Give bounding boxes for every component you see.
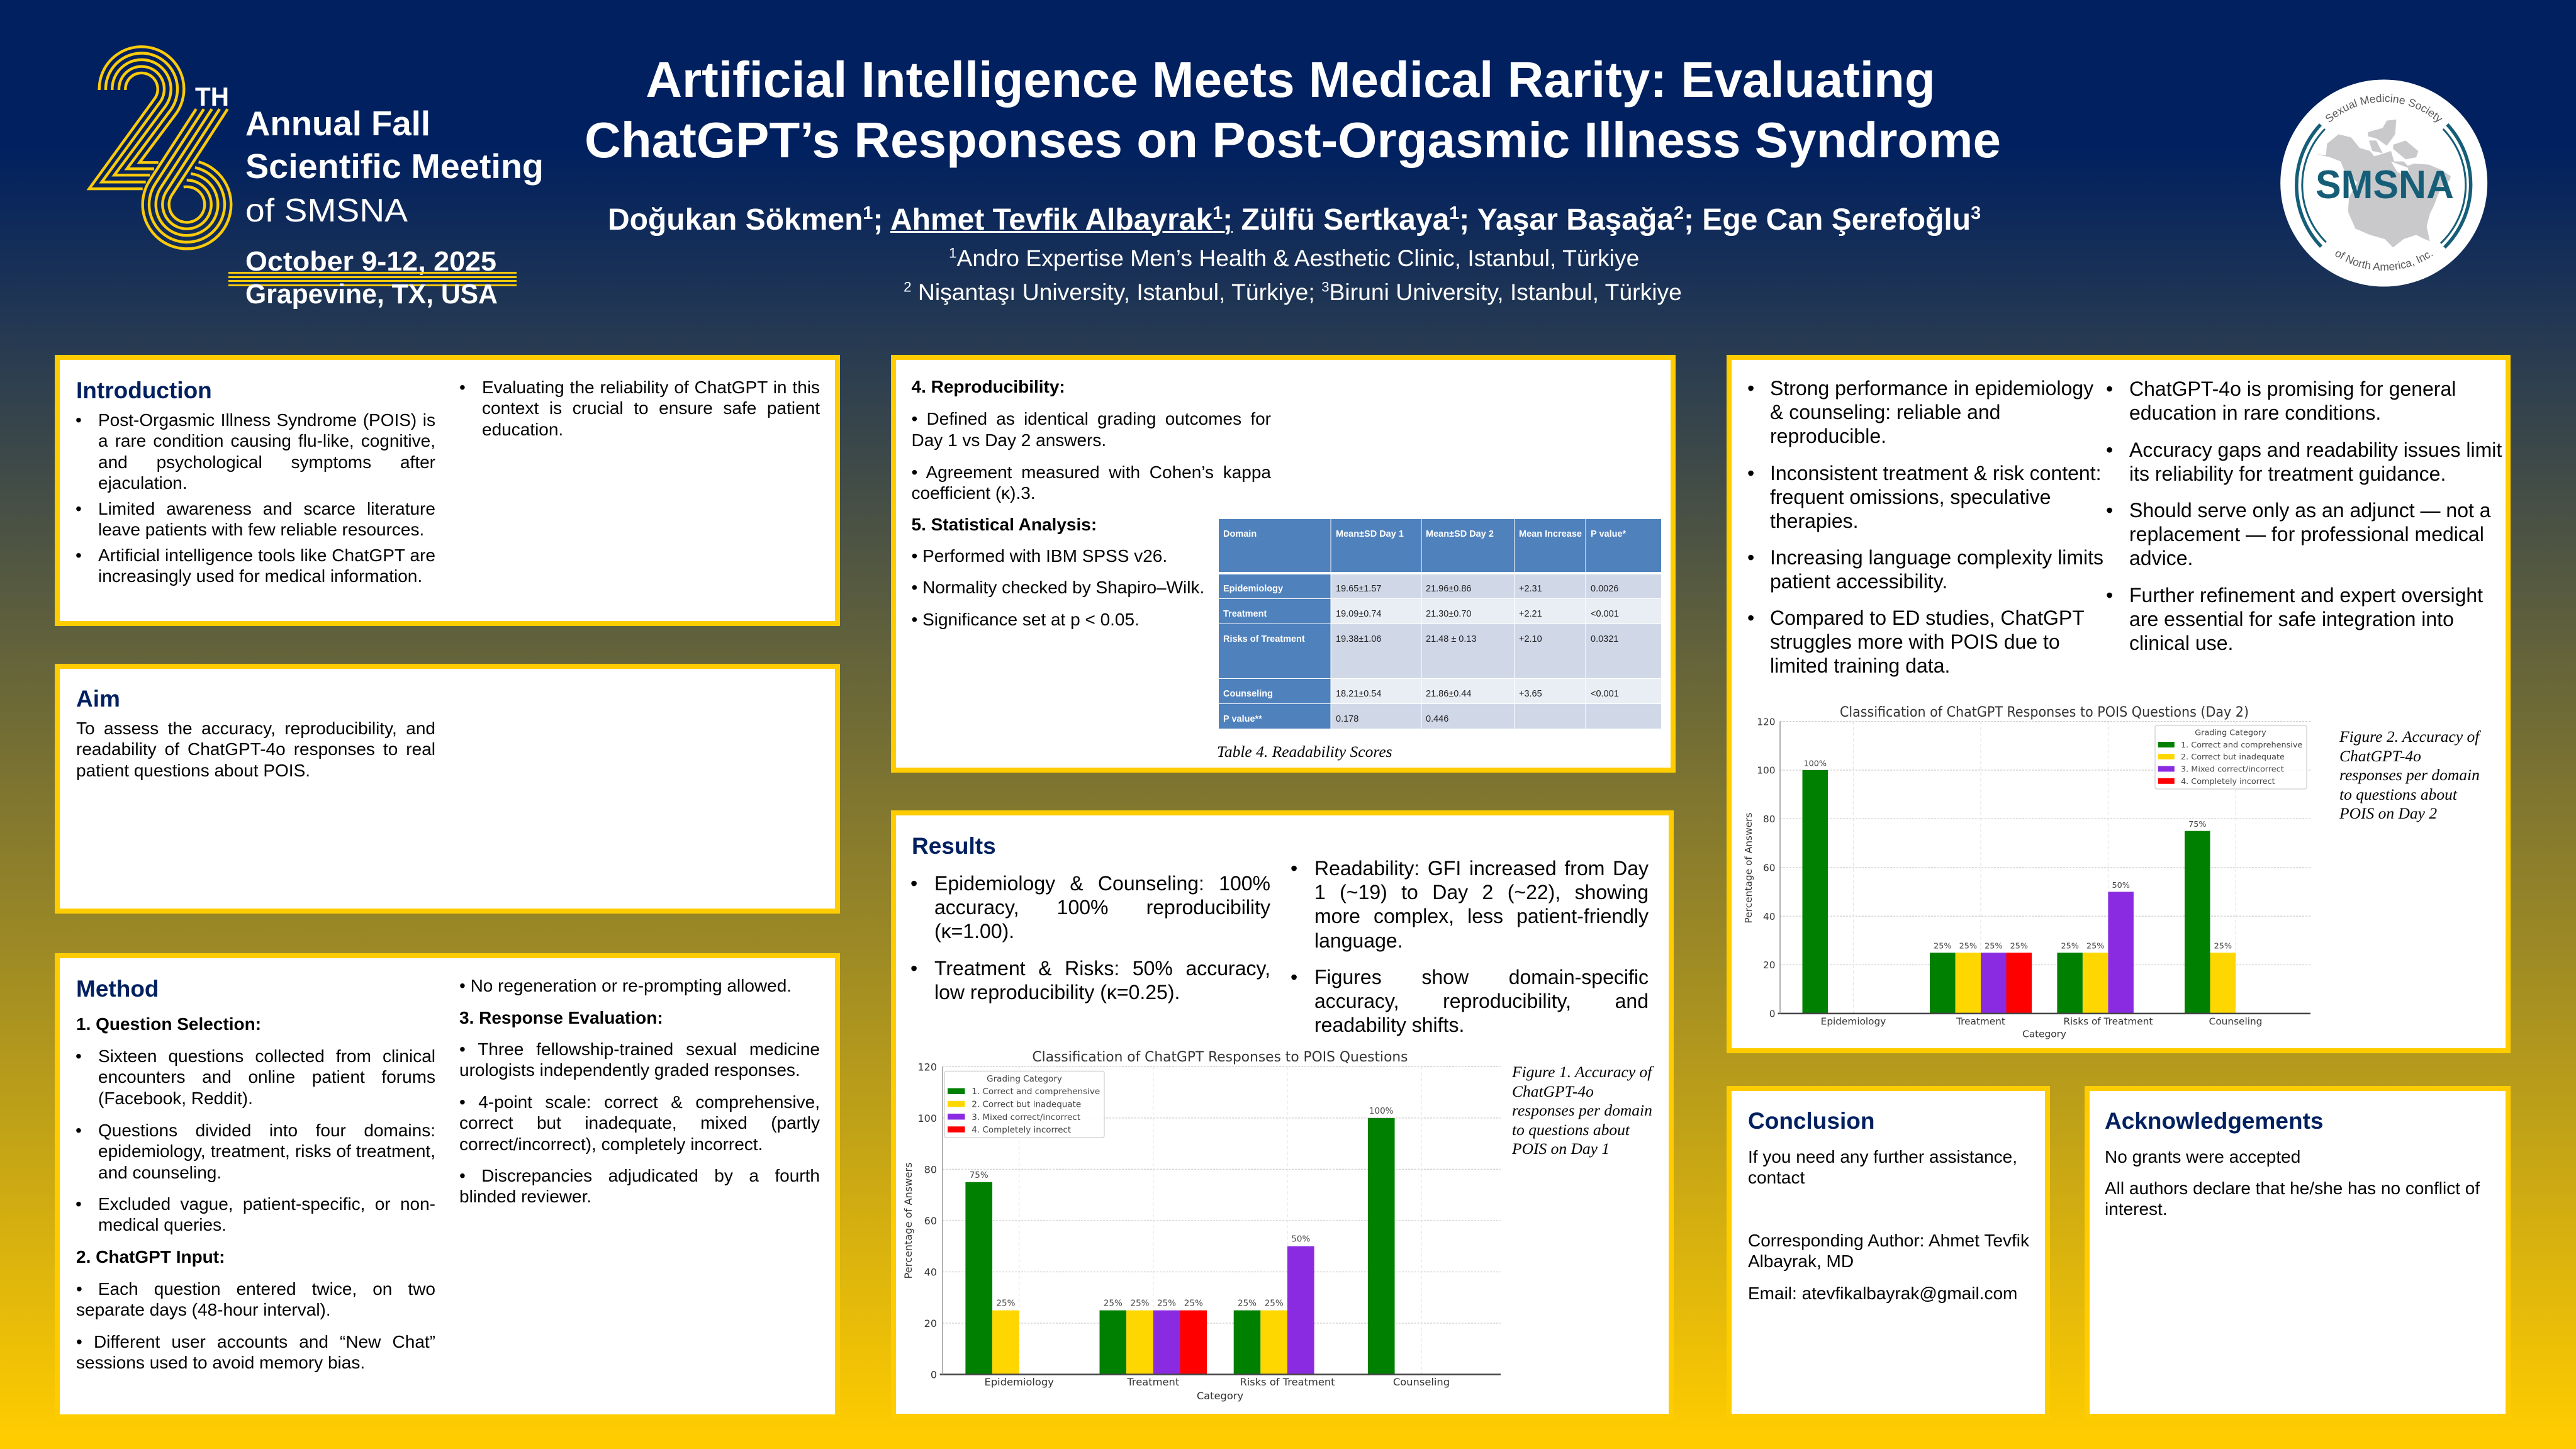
bullet: strong performance [1770, 376, 2093, 449]
table row labels [1223, 584, 1305, 724]
bullet: promising [2129, 376, 2456, 425]
chart 2 value labels: 50% [2112, 881, 2130, 890]
chart 1 value labels: 75% [970, 1170, 988, 1180]
bullet: exclusions: medical queries. [98, 1215, 227, 1234]
chart 1 axes [940, 1066, 1501, 1374]
bullet: AI tools: Artificial intelligence tools like ChatGPT are [98, 545, 435, 565]
chart 1 y axis title: Percentage of Answers [902, 1163, 914, 1278]
bullet: POIS definition: a rare condition causing flu-like, cognitive, [98, 431, 435, 450]
chart 2 bars [1802, 770, 2236, 1014]
logo meeting name: Annual Fall [245, 104, 430, 143]
text: reviewers [459, 1039, 820, 1080]
chart 1 legend: Grading Category [987, 1074, 1062, 1084]
bullet: sixteen questions [76, 1046, 435, 1108]
panel: conclusion [1727, 1086, 2050, 1419]
text: entered twice: separate days (48-hour interval). [76, 1300, 331, 1319]
text: conflict of interest: All authors declare that he/she has no conflict of [2105, 1178, 2480, 1198]
text: assistance note: If you need any further assistance, [1748, 1146, 2017, 1166]
bullet: AI tools: increasingly used for medical information. [98, 566, 422, 586]
chart 2 y tick labels: 100 [1757, 765, 1776, 776]
text: different accounts [76, 1331, 435, 1372]
chart 2 legend [2155, 725, 2307, 789]
bullet: strong performance: Strong performance in epidemiology [1770, 376, 2093, 399]
panel: results [891, 810, 1674, 1419]
chart 1 category labels [985, 1376, 1450, 1402]
chart 2 value labels: 100% [1804, 759, 1827, 769]
seal double arcs [2297, 125, 2471, 247]
text: discrepancies: blinded reviewer. [459, 1187, 591, 1206]
table values: 21.48 ± 0.13 [1426, 634, 1477, 644]
table values: <0.001 [1591, 609, 1619, 619]
bullet: evaluating reliability: education. [482, 420, 563, 439]
text: normality: • Normality checked by Shapiro–Wilk. [911, 578, 1204, 596]
text: conflict of interest [2105, 1178, 2480, 1220]
chart 1 value labels: 100% [1369, 1106, 1394, 1116]
bullet: four domains: epidemiology, treatment, risks of treatment, [98, 1141, 435, 1161]
bullet: POIS definition [76, 410, 435, 493]
chart 1 title: Classification of ChatGPT Responses to POIS Questions [1032, 1049, 1408, 1065]
bullet: adjunct [2129, 498, 2491, 571]
chart 1 value labels: 25% [1184, 1299, 1203, 1309]
chart 1 y tick labels: 0 [931, 1369, 937, 1380]
chart 2 value labels: 25% [2214, 942, 2232, 951]
chart 2 value labels: 25% [2061, 942, 2079, 951]
bullet: evaluating reliability: Evaluating the reliability of ChatGPT in this [482, 378, 820, 396]
table header row: Domain [1223, 529, 1257, 539]
chart 2 value labels: 25% [1934, 942, 1952, 951]
bullet: adjunct: advice. [2129, 547, 2193, 569]
panel: acknowledgements [2085, 1086, 2511, 1419]
table values [1336, 584, 1619, 724]
authors: Doğukan Sökmen1; Ahmet Tevfik Albayrak1; Zülfü Sertkaya1; Yaşar Başağa2; Ege Can Şerefoğlu3 [608, 203, 1981, 237]
bullet: readability: 1 (~19) to Day 2 (~22), showing [1314, 881, 1649, 904]
panel: introduction [55, 355, 840, 626]
chart 1 value labels: 25% [1265, 1299, 1284, 1309]
text: 4-point scale [459, 1092, 820, 1154]
chart 2 legend: Grading Category [2195, 729, 2266, 737]
caption: figure 1: to questions about [1512, 1120, 1630, 1139]
bullet: ED comparison: Compared to ED studies, ChatGPT [1770, 607, 2085, 629]
logo date and place with stripes [228, 246, 517, 310]
bullet: limited awareness [76, 498, 435, 539]
subheading: statistical analysis: 5. Statistical Analysis: [911, 515, 1097, 534]
chart 2 y tick labels: 20 [1763, 959, 1776, 971]
bullet: epidemiology and counseling: Epidemiology & Counseling: 100% [934, 872, 1270, 895]
text: different accounts: sessions used to avoid memory bias. [76, 1353, 365, 1372]
bullet: sixteen questions: encounters and online patient forums [98, 1067, 435, 1087]
table row labels: Treatment [1223, 609, 1267, 619]
table values: 19.38±1.06 [1336, 634, 1381, 644]
table values: +2.10 [1519, 634, 1542, 644]
table values: +2.21 [1519, 609, 1542, 619]
bullet: figures [1291, 965, 1649, 1036]
table values: 0.0321 [1591, 634, 1618, 644]
table values: 19.65±1.57 [1336, 584, 1381, 594]
table row labels: Epidemiology [1223, 584, 1283, 594]
logo date and place with stripes: Grapevine, TX, USA [245, 279, 498, 310]
text: aim statement [76, 719, 435, 780]
bullet: accuracy gaps [2129, 438, 2502, 486]
caption: figure 2: responses per domain [2339, 766, 2480, 784]
icon: striped numeral 2 [89, 47, 184, 189]
text: defined as identical [911, 409, 1271, 450]
caption: figure 2 [2339, 727, 2480, 823]
chart 1 y tick labels: 80 [924, 1163, 937, 1175]
bullet: treatment and risks: Treatment & Risks: 50% accuracy, [934, 956, 1270, 979]
bullet: exclusions: Excluded vague, patient-specific, or non- [98, 1194, 435, 1213]
chart 1 category labels: Risks of Treatment [1240, 1376, 1335, 1388]
panel: introduction: • [76, 410, 82, 429]
text: aim statement: To assess the accuracy, reproducibility, and [76, 719, 435, 737]
text: assistance note [1748, 1146, 2029, 1189]
chart 1 y tick labels [917, 1061, 937, 1380]
bullet: further refinement [2129, 583, 2483, 656]
text: discrepancies: • Discrepancies adjudicated by a fourth [459, 1165, 820, 1185]
seal curved text: Sexual Medicine Society [2326, 94, 2443, 122]
chart 2 value labels: 25% [1985, 942, 2003, 951]
chart 2 legend: 2. Correct but inadequate [2181, 752, 2285, 762]
chart 2 value labels: 25% [1959, 942, 1977, 951]
caption: figure 2: POIS on Day 2 [2339, 804, 2437, 822]
heading: conclusion: Conclusion [1748, 1108, 1874, 1134]
logo date and place with stripes: October 9-12, 2025 [245, 246, 496, 277]
chart 2 category labels: Category [2022, 1028, 2066, 1039]
chart 1 category labels: Counseling [1393, 1376, 1450, 1388]
bullet: further refinement: Further refinement and expert oversight [2129, 584, 2483, 607]
logo meeting name: of SMSNA [245, 193, 408, 229]
chart 2 title: Classification of ChatGPT Responses to POIS Questions (Day 2) [1840, 705, 2249, 720]
table values: 19.09±0.74 [1336, 609, 1381, 619]
table row labels: P value** [1223, 714, 1262, 724]
chart 1 legend: 4. Completely incorrect [972, 1125, 1071, 1135]
chart 1 category labels: Category [1197, 1390, 1244, 1402]
table row labels: Risks of Treatment [1223, 634, 1305, 644]
bullet: inconsistent treatment: Inconsistent treatment & risk content: [1770, 462, 2101, 484]
title: Artificial Intelligence Meets Medical Rarity: Evaluating [646, 52, 1935, 108]
chart 1 y tick labels: 100 [917, 1112, 937, 1124]
panel: results: • [910, 872, 917, 895]
chart 2 y tick labels: 80 [1763, 814, 1776, 825]
table: readability scores [1219, 519, 1661, 729]
text: aim statement: readability of ChatGPT-4o responses to real [76, 739, 435, 759]
bullet: sixteen questions: Sixteen questions collected from clinical [98, 1046, 435, 1066]
logo meeting name [245, 104, 544, 229]
chart 1 value labels: 25% [1157, 1299, 1176, 1309]
text: corresponding author: Corresponding Author: Ahmet Tevfik [1748, 1231, 2029, 1250]
bullet: inconsistent treatment: frequent omissions, speculative [1770, 486, 2051, 508]
seal wordmark: SMSNA [2316, 163, 2454, 207]
seal curved text: of North America, Inc. [2336, 251, 2433, 271]
table values: 21.96±0.86 [1426, 584, 1471, 594]
chart 1 legend: 2. Correct but inadequate [972, 1099, 1081, 1109]
caption: figure 1 [1512, 1063, 1652, 1159]
table fills [1219, 519, 1661, 729]
text: no regeneration: • No regeneration or re-prompting allowed. [459, 975, 792, 995]
bar chart: day 1 classification [900, 1044, 1504, 1409]
bullet: adjunct: Should serve only as an adjunct — not a [2129, 498, 2491, 521]
bullet: figures: readability shifts. [1314, 1014, 1464, 1036]
heading: results: Results [912, 833, 996, 859]
table row labels: Counseling [1223, 689, 1273, 699]
bullet: readability: more complex, less patient-friendly [1314, 905, 1649, 927]
chart 2 axes [1778, 722, 2310, 1014]
text: reviewers: • Three fellowship-trained sexual medicine [459, 1039, 820, 1058]
chart 2 gridlines [1780, 722, 2310, 1014]
table header row: Mean±SD Day 1 [1336, 529, 1404, 539]
bullet: strong performance: reproducible. [1770, 425, 1886, 447]
bullet: inconsistent treatment [1770, 461, 2101, 534]
bullet: sixteen questions: (Facebook, Reddit). [98, 1088, 253, 1108]
bullet: language complexity: patient accessibility. [1770, 570, 1947, 593]
subheading: chatgpt input: 2. ChatGPT Input: [76, 1247, 225, 1266]
text: discrepancies [459, 1165, 820, 1206]
text: assistance note: contact [1748, 1168, 1805, 1187]
text: conflict of interest: interest. [2105, 1199, 2168, 1219]
chart 2 value labels: 25% [2086, 942, 2104, 951]
table values: +3.65 [1519, 689, 1542, 699]
chart 1 legend: 1. Correct and comprehensive [972, 1087, 1100, 1097]
chart 1 y tick labels: 20 [924, 1318, 937, 1329]
chart 2 category labels: Treatment [1956, 1015, 2005, 1027]
text: cohen kappa [911, 462, 1271, 503]
bullet: four domains: Questions divided into four domains: [98, 1120, 435, 1140]
table header row: P value* [1591, 529, 1627, 539]
chart 2 y tick labels [1757, 716, 1776, 1020]
bullet: ED comparison: struggles more with POIS due to [1770, 630, 2060, 653]
heading: method: Method [76, 976, 159, 1002]
bullet: adjunct: replacement — for professional medical [2129, 523, 2484, 545]
subheading: response evaluation: 3. Response Evaluation: [459, 1008, 663, 1027]
bullet: four domains [76, 1120, 435, 1182]
chart 1 category labels: Treatment [1126, 1376, 1179, 1388]
text: defined as identical: Day 1 vs Day 2 answers. [911, 430, 1106, 450]
panel: results: • [1291, 857, 1297, 880]
chart 1 gridlines [943, 1066, 1501, 1374]
bullet: epidemiology and counseling [910, 872, 1270, 943]
bullet: accuracy gaps: Accuracy gaps and readability issues limit [2129, 438, 2502, 461]
table values: +2.31 [1519, 584, 1542, 594]
chart 1 value labels: 25% [996, 1299, 1016, 1309]
bullet: POIS definition: and psychological symptoms after [98, 452, 435, 472]
chart 2 y tick labels: 0 [1769, 1009, 1776, 1020]
table values: <0.001 [1591, 689, 1619, 699]
bullet: treatment and risks: low reproducibility (κ=0.25). [934, 981, 1180, 1004]
text: email: Email: atevfikalbayrak@gmail.com [1748, 1284, 2017, 1302]
bullet: evaluating reliability: context is crucial to ensure safe patient [482, 398, 820, 418]
chart 2 category labels: Counseling [2209, 1015, 2262, 1027]
heading: introduction: Introduction [76, 378, 212, 403]
text: significance: • Significance set at p < 0.05. [911, 609, 1140, 629]
panel: discussion and chart: • [2106, 498, 2113, 521]
logo: 26th annual fall scientific meeting [87, 45, 544, 310]
chart 2 category labels [1821, 1015, 2262, 1039]
bullet: inconsistent treatment: therapies. [1770, 510, 1859, 532]
text: grants: No grants were accepted [2105, 1146, 2300, 1166]
logo meeting name: Scientific Meeting [245, 147, 544, 186]
heading: acknowledgements: Acknowledgements [2105, 1108, 2323, 1134]
panel: discussion and chart: • [2106, 584, 2113, 607]
bullet: evaluating reliability [459, 378, 820, 439]
panel: method: • [76, 1120, 82, 1140]
table values: 18.21±0.54 [1336, 689, 1381, 699]
bullet: four domains: and counseling. [98, 1163, 221, 1182]
chart 2 category labels: Risks of Treatment [2063, 1015, 2153, 1027]
panel: discussion and chart: • [1747, 376, 1754, 399]
bullet: ED comparison: limited training data. [1770, 654, 1950, 677]
chart 1 value labels [970, 1106, 1394, 1309]
caption: figure 1: POIS on Day 1 [1512, 1139, 1610, 1158]
table header row: Mean±SD Day 2 [1426, 529, 1494, 539]
text: 4-point scale: correct but inadequate, mixed (partly [459, 1113, 820, 1133]
title [585, 52, 2001, 168]
seal background circle [2280, 79, 2487, 287]
bar chart: day 2 classification [1733, 702, 2312, 1044]
bullet: epidemiology and counseling: accuracy, 100% reproducibility [934, 896, 1270, 919]
chart 2 legend: 4. Completely incorrect [2181, 777, 2275, 786]
text: different accounts: • Different user accounts and “New Chat” [76, 1331, 435, 1351]
panel: introduction: • [76, 545, 82, 565]
chart 2 value labels [1804, 759, 2232, 951]
icon: striped numeral 6 [143, 109, 231, 249]
caption: figure 2: ChatGPT-4o [2339, 746, 2421, 765]
table header row [1223, 529, 1627, 539]
bullet: treatment and risks [910, 956, 1270, 1004]
panel: introduction: • [76, 498, 82, 518]
text: 4-point scale: correct/incorrect), completely incorrect. [459, 1134, 763, 1154]
chart 1 category labels: Epidemiology [985, 1376, 1054, 1388]
caption: figure 1: Figure 1. Accuracy of [1512, 1063, 1652, 1081]
caption: figure 2: Figure 2. Accuracy of [2339, 727, 2479, 746]
bullet: readability: Readability: GFI increased from Day [1314, 857, 1649, 880]
caption: figure 1: responses per domain [1512, 1101, 1652, 1119]
text: corresponding author [1748, 1229, 2029, 1272]
chart 1 value labels: 25% [1238, 1299, 1257, 1309]
chart 1 legend: 3. Mixed correct/incorrect [972, 1112, 1080, 1122]
table values: 21.86±0.44 [1426, 689, 1471, 699]
bullet: AI tools [76, 545, 435, 586]
panel: method: • [76, 1194, 82, 1213]
bullet: readability [1291, 857, 1649, 952]
chart 2 y axis title: Percentage of Answers [1743, 812, 1754, 924]
chart 1 bars [965, 1118, 1395, 1374]
subheading: question selection: 1. Question Selection: [76, 1014, 261, 1034]
seal curved text [2326, 94, 2443, 271]
bullet: ED comparison [1770, 605, 2085, 678]
bullet: epidemiology and counseling: (κ=1.00). [934, 920, 1014, 943]
chart 1 value labels: 25% [1104, 1299, 1123, 1309]
text: aim statement: patient questions about POIS. [76, 761, 310, 780]
bullet: POIS definition: Post-Orgasmic Illness Syndrome (POIS) is [98, 410, 435, 429]
table values: 0.178 [1336, 714, 1358, 724]
text: cohen kappa: • Agreement measured with Cohen’s kappa [911, 462, 1271, 482]
bullet: figures: accuracy, reproducibility, and [1314, 990, 1649, 1012]
panel: results: • [1291, 965, 1297, 988]
table values: 0.0026 [1591, 584, 1618, 594]
panel: discussion and chart: • [2106, 378, 2113, 400]
panel: aim [55, 664, 840, 914]
bullet: language complexity [1770, 545, 2103, 593]
table header row: Mean Increase [1519, 529, 1582, 539]
bullet: limited awareness: Limited awareness and scarce literature [98, 498, 435, 518]
text: entered twice [76, 1278, 435, 1319]
chart 2 category labels: Epidemiology [1821, 1015, 1886, 1027]
caption: table 4: Table 4. Readability Scores [1217, 742, 1392, 761]
panel: reproducibility and statistics [891, 355, 1676, 773]
chart 2 y tick labels: 120 [1757, 716, 1776, 727]
bullet: further refinement: are essential for safe integration into [2129, 608, 2454, 630]
panel: results: • [910, 956, 917, 979]
bullet: language complexity: Increasing language complexity limits [1770, 546, 2103, 569]
panel: discussion and chart: • [1747, 607, 1754, 629]
panel: method [55, 953, 840, 1419]
subheading: reproducibility: 4. Reproducibility: [911, 376, 1065, 396]
table values: 21.30±0.70 [1426, 609, 1471, 619]
panel: discussion and chart [1727, 355, 2511, 1053]
chart 1 y tick labels: 40 [924, 1266, 937, 1278]
bullet: POIS definition: ejaculation. [98, 473, 188, 493]
text: cohen kappa: coefficient (κ).3. [911, 483, 1036, 503]
panel: discussion and chart: • [1747, 546, 1754, 569]
bullet: figures: Figures show domain-specific [1314, 965, 1649, 988]
text: entered twice: • Each question entered twice, on two [76, 1278, 435, 1299]
bullet: limited awareness: leave patients with few reliable resources. [98, 520, 424, 539]
bullet: strong performance: & counseling: reliable and [1770, 401, 2000, 423]
logo: SMSNA society seal [2280, 79, 2488, 287]
caption: figure 2: to questions about [2339, 785, 2457, 803]
bullet: accuracy gaps: its reliability for treatment guidance. [2129, 462, 2446, 485]
text: spss: • Performed with IBM SPSS v26. [911, 546, 1167, 565]
chart 1 value labels: 50% [1291, 1234, 1310, 1245]
icon: north america map [2317, 120, 2451, 247]
bullet: promising: ChatGPT-4o is promising for general [2129, 378, 2456, 400]
text: reviewers: urologists independently graded responses. [459, 1060, 800, 1080]
affiliation 1: 1Andro Expertise Men’s Health & Aesthetic Clinic, Istanbul, Türkiye [949, 245, 1639, 271]
chart 2 value labels: 75% [2188, 820, 2207, 829]
bullet: further refinement: clinical use. [2129, 632, 2233, 654]
affiliations 2 and 3: 2 Nişantaşı University, Istanbul, Türkiye; 3Biruni University, Istanbul, Türkiye [904, 279, 1682, 305]
panel: discussion and chart: • [1747, 462, 1754, 484]
chart 2 legend: 3. Mixed correct/incorrect [2181, 765, 2284, 774]
chart 1 y tick labels: 60 [924, 1215, 937, 1227]
text: 4-point scale: • 4-point scale: correct & comprehensive, [459, 1092, 820, 1111]
logo ordinal suffix: TH [195, 82, 229, 111]
chart 1 legend [944, 1071, 1104, 1138]
table values: 0.446 [1426, 714, 1448, 724]
heading: aim: Aim [76, 686, 120, 712]
text: corresponding author: Albayrak, MD [1748, 1251, 1854, 1271]
caption: figure 1: ChatGPT-4o [1512, 1082, 1594, 1100]
bullet: promising: education in rare conditions. [2129, 401, 2381, 424]
chart 1 value labels: 25% [1130, 1299, 1150, 1309]
panel: discussion and chart: • [2106, 438, 2113, 461]
chart 2 y tick labels: 60 [1763, 862, 1776, 873]
chart 1 y tick labels: 120 [917, 1061, 937, 1073]
chart 2 value labels: 25% [2010, 942, 2028, 951]
title: ChatGPT’s Responses on Post-Orgasmic Illness Syndrome [585, 112, 2001, 168]
bullet: exclusions [76, 1194, 435, 1234]
text: defined as identical: • Defined as identical grading outcomes for [911, 409, 1271, 428]
chart 2 legend: 1. Correct and comprehensive [2181, 741, 2302, 750]
bullet: readability: language. [1314, 929, 1403, 952]
panel: introduction: • [459, 378, 466, 396]
chart 2 y tick labels: 40 [1763, 911, 1776, 922]
panel: method: • [76, 1046, 82, 1066]
